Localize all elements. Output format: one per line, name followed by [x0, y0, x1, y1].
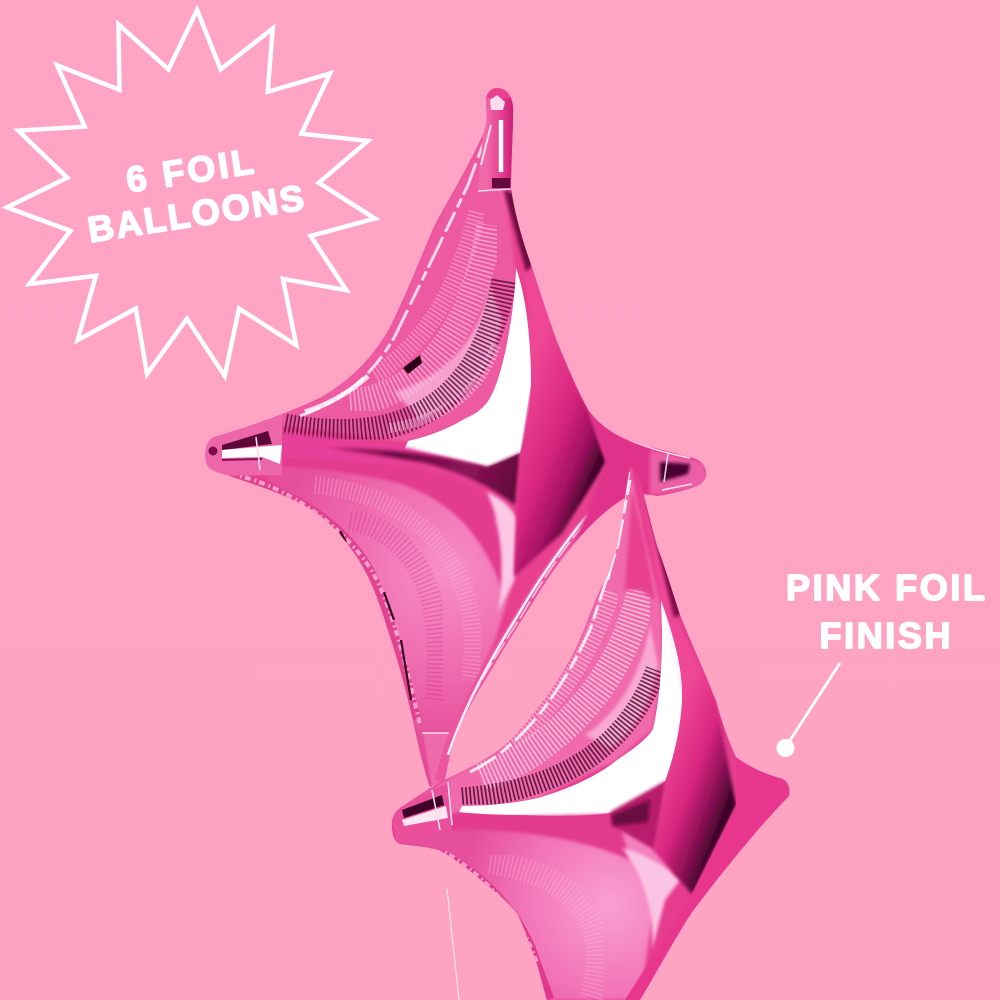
dark horizontal band: [322, 447, 520, 505]
magenta band: [445, 814, 630, 860]
lower lobe: [400, 822, 680, 1000]
knot gather lines: [432, 782, 452, 830]
white crescent: [404, 273, 531, 467]
lower edge band: [440, 856, 548, 1000]
arm dark core: [660, 462, 690, 482]
lower lobe: [267, 452, 515, 787]
left neck lower dark line: [222, 459, 262, 460]
left edge highlights: [300, 136, 486, 416]
magenta panel: [282, 456, 502, 590]
starburst outline: [7, 10, 375, 376]
neck left gleam: [481, 125, 491, 165]
top fold magenta: [625, 490, 655, 600]
dark ribs: [462, 670, 656, 798]
leader dot: [776, 739, 794, 757]
left neck ring: [256, 437, 260, 470]
lower edge texture: [240, 476, 420, 725]
right edge dark streak: [646, 500, 684, 618]
centre facet: [641, 484, 736, 894]
upper lobe pale ribs: [350, 225, 490, 402]
neck base line: [478, 189, 511, 191]
strip highlights: [446, 512, 590, 756]
upper lobe white rib tips: [390, 345, 496, 428]
white crescent right edge: [516, 268, 531, 453]
neck dark ring: [492, 178, 510, 188]
pale reflection: [487, 492, 516, 612]
dark accent: [403, 355, 422, 374]
left knot: [208, 446, 218, 456]
callout text line 1: PINK FOIL: [786, 567, 985, 608]
upper lobe: [392, 466, 663, 825]
left neck white: [402, 806, 448, 826]
upper edge white gleam: [305, 376, 368, 412]
tail highlight: [422, 732, 458, 734]
upper lobe: [269, 138, 516, 442]
pale reflection: [622, 848, 680, 950]
pale ribs: [482, 590, 642, 778]
lower edge texture: [445, 852, 538, 965]
lower lobe ribs: [315, 485, 473, 680]
right arm: [573, 413, 706, 544]
magenta upper band: [282, 430, 490, 478]
upper lobe dark ribs: [285, 280, 504, 432]
left neck dark: [402, 795, 444, 818]
tail ring: [423, 734, 448, 786]
white crescent: [459, 605, 682, 816]
upper lobe outer pale ribs: [375, 210, 478, 375]
upper lobe light panel: [585, 625, 658, 748]
lower edge band: [230, 478, 415, 720]
top fold highlight: [608, 472, 629, 580]
balloon 2 (lower pink foil star): [380, 460, 800, 1000]
left neck dark: [222, 431, 272, 450]
arm end texture: [650, 450, 707, 496]
badge text line 1: 6 FOIL: [123, 141, 256, 200]
centre facet: [509, 190, 606, 577]
crescent right edge: [656, 600, 682, 781]
outer ribs: [505, 590, 612, 745]
upper lobe light panel: [395, 285, 502, 420]
balloon 2 base: [380, 460, 800, 1000]
balloon 1 base: [190, 80, 720, 800]
lower ribs: [490, 862, 598, 1000]
leader line: [787, 663, 840, 745]
starburst badge: 6 foil balloons: [7, 10, 375, 376]
upper dark streak: [504, 190, 535, 272]
callout text line 2: FINISH: [820, 615, 950, 656]
lower edge sparkle: [340, 531, 411, 700]
strip: [435, 510, 607, 782]
dark band: [610, 781, 665, 850]
arm white gather lines: [625, 438, 692, 490]
balloon 1 (upper pink foil star): [190, 80, 720, 800]
left neck white: [222, 445, 282, 464]
badge text line 2: BALLOONS: [85, 177, 307, 250]
neck highlight: [499, 120, 503, 172]
strip inner highlights: [464, 523, 584, 712]
top neck: [478, 98, 514, 190]
edge highlights: [470, 480, 630, 772]
neck knot: [490, 95, 505, 110]
right wing: [625, 757, 789, 1000]
callout: pink foil finish: [776, 567, 985, 757]
left neck: [205, 415, 282, 476]
string: [447, 889, 459, 1000]
left neck: [392, 782, 452, 845]
lower lobe inner ribs: [350, 520, 438, 700]
dark band core: [612, 800, 650, 826]
